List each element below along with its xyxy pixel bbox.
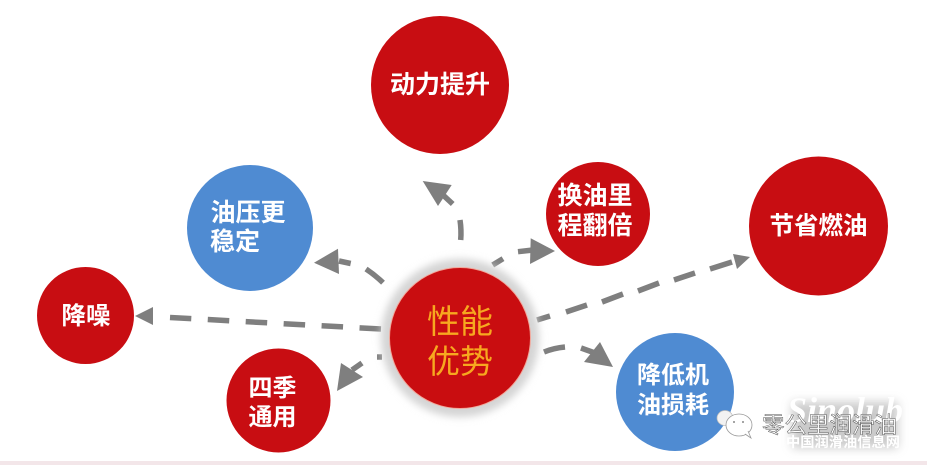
- arrow: to doubled oil change interval: [493, 238, 555, 265]
- circle: all-season use: 通用: [248, 404, 296, 431]
- arrow: to noise reduction: [135, 307, 381, 329]
- circle: lower oil consumption: 油损耗: [637, 392, 709, 419]
- circle: fuel saving: [749, 156, 888, 296]
- circle: noise reduction: [37, 267, 134, 364]
- circle: power boost: 动力提升: [390, 71, 490, 99]
- circle: oil pressure stability: 油压更: [210, 199, 286, 227]
- central circle: performance advantages: 性能: [427, 303, 493, 340]
- circle: oil pressure stability: [187, 165, 313, 291]
- watermark: account name: 零公里润滑油: [762, 413, 897, 438]
- circle: power boost: [371, 16, 509, 154]
- circle: oil pressure stability: 稳定: [210, 228, 260, 256]
- circle: fuel saving: 节省燃油: [770, 212, 868, 240]
- arrow: to lower oil consumption: [544, 342, 613, 367]
- watermark: Sinolub logo: 中国润滑油信息网: [786, 433, 900, 451]
- arrow: to fuel saving: [537, 254, 750, 320]
- central circle: performance advantages: [381, 259, 539, 417]
- arrow: to oil pressure stability: [314, 249, 383, 283]
- circle: doubled oil change interval: 换油里: [557, 182, 633, 210]
- circle: all-season use: 四季: [248, 375, 296, 402]
- circle: noise reduction: 降噪: [62, 302, 110, 330]
- watermark: Sinolub logo: [786, 390, 903, 451]
- icon: chat bubbles: [717, 410, 752, 438]
- circle: lower oil consumption: 降低机: [637, 362, 709, 389]
- arrow: to all-season use: [337, 357, 382, 391]
- circle: all-season use: [226, 348, 330, 452]
- circle: lower oil consumption: [616, 333, 734, 451]
- arrow: to power boost: [423, 181, 461, 240]
- central circle: performance advantages: 优势: [427, 343, 493, 380]
- circle: doubled oil change interval: 程翻倍: [557, 212, 633, 240]
- circle: doubled oil change interval: [546, 162, 650, 266]
- watermark: Sinolub logo: Sinolub: [787, 390, 903, 430]
